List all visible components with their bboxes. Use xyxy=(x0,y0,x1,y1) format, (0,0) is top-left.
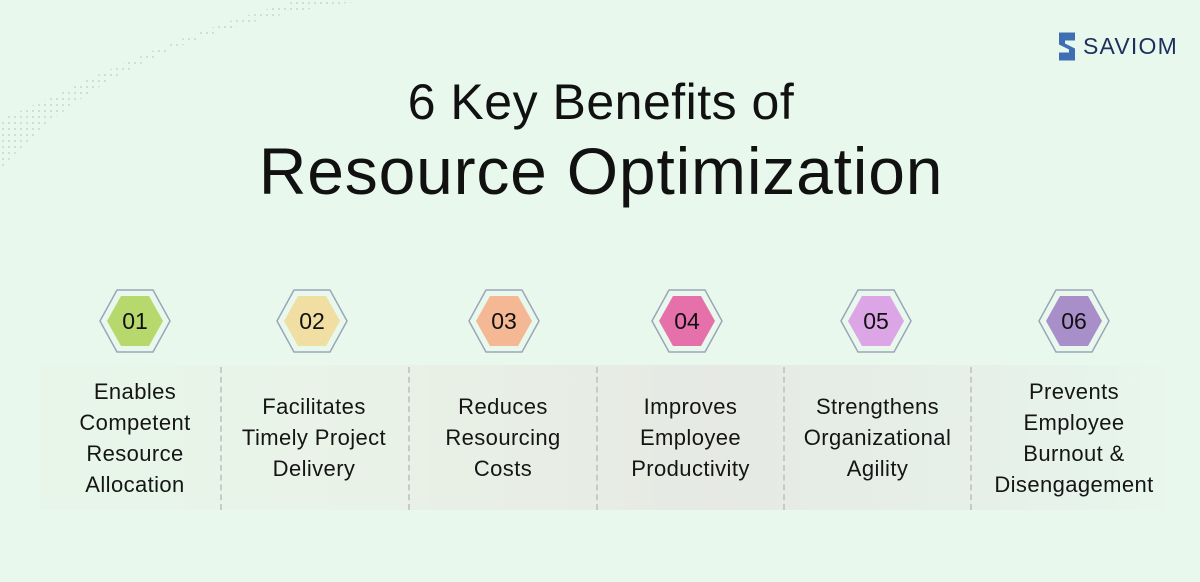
text 02: Facilitates xyxy=(262,394,366,419)
badge 05: 05 xyxy=(863,308,889,334)
text 06 xyxy=(994,378,1154,496)
text 03: Resourcing xyxy=(445,425,561,450)
title: 6 Key Benefits of xyxy=(408,74,794,130)
title: Resource Optimization xyxy=(259,134,943,208)
text 01 xyxy=(79,378,191,496)
text 03 xyxy=(445,394,561,481)
text 03: Costs xyxy=(474,456,532,481)
text 05: Agility xyxy=(847,456,908,481)
text 03: Reduces xyxy=(458,394,548,419)
badge 06 xyxy=(1039,290,1109,352)
title xyxy=(259,74,943,208)
badge 05 xyxy=(841,290,911,352)
decorative dots top-left xyxy=(2,2,352,166)
badge 01: 01 xyxy=(122,308,148,334)
text 04 xyxy=(631,394,750,481)
text 06: Prevents xyxy=(1029,378,1119,404)
text 04: Improves xyxy=(644,394,737,419)
text 05: Strengthens xyxy=(816,394,939,419)
badge 03 xyxy=(469,290,539,352)
text 02: Delivery xyxy=(273,456,355,481)
badge 04: 04 xyxy=(674,308,700,334)
text 01: Enables xyxy=(94,378,176,404)
badge 03: 03 xyxy=(491,308,517,334)
text 06: Employee xyxy=(1023,410,1124,434)
badge 04 xyxy=(652,290,722,352)
hexagon badges xyxy=(99,289,1110,353)
text 01: Competent xyxy=(79,410,191,434)
badge 02: 02 xyxy=(299,308,325,334)
badge 06: 06 xyxy=(1061,308,1087,334)
text 02 xyxy=(242,394,386,481)
text 05: Organizational xyxy=(804,425,951,450)
text 04: Productivity xyxy=(631,456,750,481)
text 01: Allocation xyxy=(85,472,185,496)
text 04: Employee xyxy=(640,425,741,450)
text 06: Burnout & xyxy=(1023,440,1125,466)
text 05 xyxy=(804,394,951,481)
logo: SAVIOM xyxy=(1083,33,1178,59)
badge 01 xyxy=(100,290,170,352)
text 02: Timely Project xyxy=(242,425,386,450)
text 06: Disengagement xyxy=(994,472,1154,496)
band background xyxy=(40,365,1165,510)
badge 02 xyxy=(277,290,347,352)
text 01: Resource xyxy=(86,440,184,466)
